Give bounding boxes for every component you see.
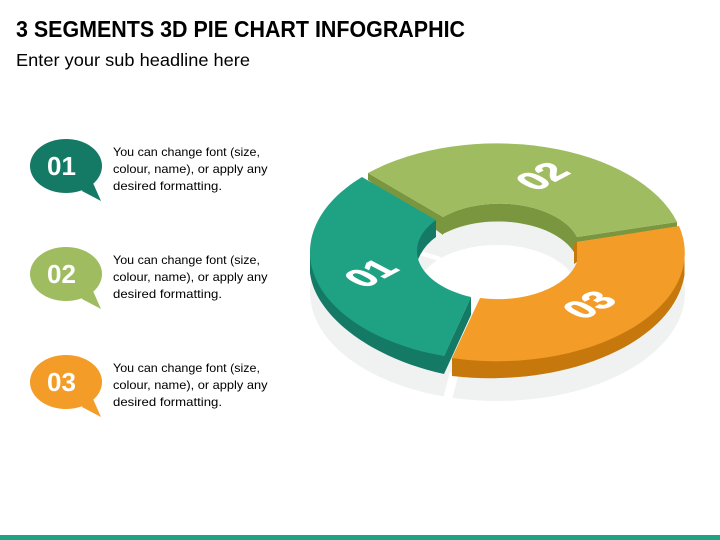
speech bubble 03 xyxy=(30,355,102,417)
description 02: desired formatting. xyxy=(113,287,222,301)
title: 3 SEGMENTS 3D PIE CHART INFOGRAPHIC xyxy=(16,16,465,42)
description 01: desired formatting. xyxy=(113,179,222,193)
label 03: 03 xyxy=(552,285,626,324)
speech bubble 03: 03 xyxy=(47,367,76,397)
3D donut chart xyxy=(310,143,685,401)
speech bubble 01 xyxy=(30,139,102,201)
description 02 xyxy=(113,253,268,301)
speech bubble 02: 02 xyxy=(47,259,76,289)
description 03 xyxy=(113,361,268,409)
label 01: 01 xyxy=(334,254,408,292)
description 02: colour, name), or apply any xyxy=(113,270,268,284)
legend item 03 xyxy=(30,355,268,417)
subtitle: Enter your sub headline here xyxy=(16,50,250,70)
footer bar xyxy=(0,535,720,540)
speech bubble 01: 01 xyxy=(47,151,76,181)
description 03: colour, name), or apply any xyxy=(113,378,268,392)
speech bubble 02 xyxy=(30,247,102,309)
description 01: You can change font (size, xyxy=(113,145,260,159)
ground shadow xyxy=(310,184,685,401)
description 02: You can change font (size, xyxy=(113,253,260,267)
legend item 01 xyxy=(30,139,268,201)
label 02: 02 xyxy=(505,157,579,195)
description 01 xyxy=(113,145,268,193)
segment 02 green xyxy=(368,143,677,258)
description 03: desired formatting. xyxy=(113,395,222,409)
legend item 02 xyxy=(30,247,268,309)
description 03: You can change font (size, xyxy=(113,361,260,375)
segment 01 teal xyxy=(310,177,471,374)
description 01: colour, name), or apply any xyxy=(113,162,268,176)
segment 03 orange xyxy=(452,226,685,378)
